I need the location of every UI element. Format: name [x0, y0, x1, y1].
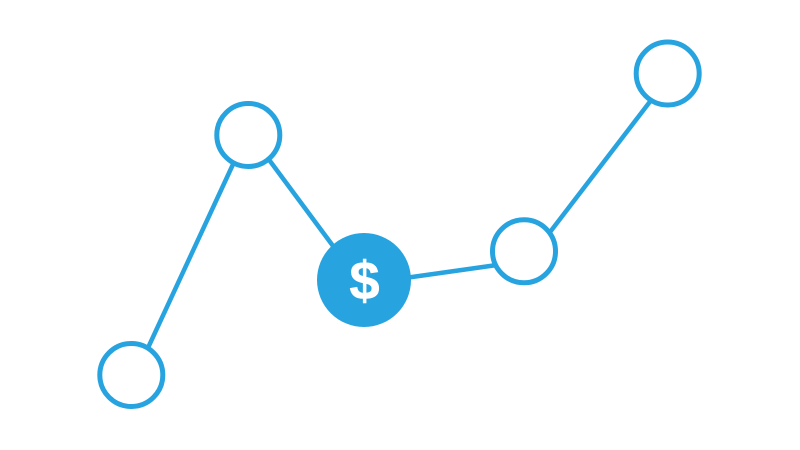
node 4: middle right	[492, 220, 556, 283]
node 3: dollar marker	[317, 233, 411, 327]
dollar sign: $	[349, 251, 380, 311]
connecting line	[147, 99, 652, 350]
node 5: top right	[636, 42, 699, 105]
node 2: upper left peak	[217, 104, 280, 166]
node 1: bottom left	[100, 344, 163, 406]
